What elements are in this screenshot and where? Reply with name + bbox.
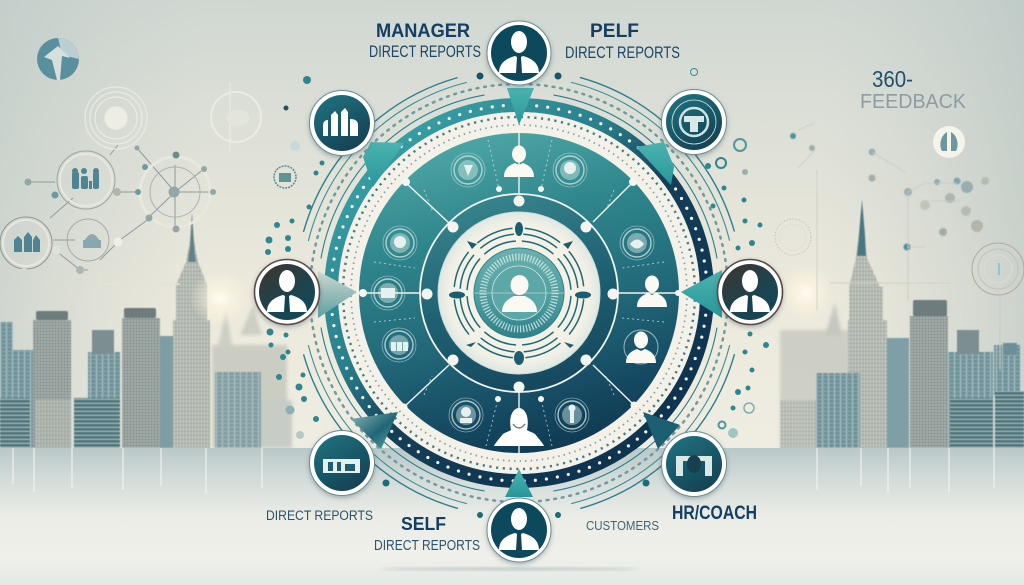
- icon: building in network circle: [83, 234, 101, 248]
- inner dark ring: [420, 194, 618, 392]
- node: manager top: [487, 21, 551, 85]
- icon: bottom woman: [494, 408, 544, 446]
- scattered dots right of wheel: [690, 68, 769, 438]
- pointer: lower left: [351, 412, 398, 449]
- icon: group in network circle: [72, 168, 99, 189]
- faint ring icons: [85, 82, 261, 152]
- label: manager direct reports: DIRECT REPORTS: [369, 43, 481, 61]
- node: upper left: [310, 90, 374, 156]
- label: pelf: PELF: [590, 20, 639, 42]
- pointer: upper right: [636, 142, 674, 185]
- disk small emblem icons: [371, 153, 654, 432]
- node: lower right: [662, 432, 726, 496]
- label: customers: CUSTOMERS: [586, 518, 659, 533]
- ring nodes: [359, 178, 681, 410]
- node: upper right: [662, 90, 726, 154]
- centre emblem: [438, 212, 600, 374]
- right skyline: [780, 200, 1024, 448]
- node: self bottom: [487, 498, 551, 562]
- label: lower left direct reports: DIRECT REPORTS: [266, 508, 373, 523]
- left skyline: [0, 213, 292, 448]
- outer dark band with dots: [331, 105, 707, 481]
- label: feedback: FEEDBACK: [860, 91, 967, 113]
- node: lower left: [310, 430, 374, 496]
- label: hr coach: HR/COACH: [672, 503, 757, 524]
- centre person icon: [502, 275, 537, 312]
- icon: right person: [637, 276, 667, 307]
- pointer: right: [681, 270, 722, 318]
- pointer: top: [507, 88, 534, 125]
- label: 360: 360-: [872, 66, 913, 92]
- main wheel disk: [359, 133, 679, 453]
- logo icon top left: [37, 38, 79, 80]
- ring icon faint: [775, 219, 811, 255]
- label: self: SELF: [401, 514, 446, 534]
- pointer: left: [318, 271, 357, 318]
- node: left: [254, 260, 320, 324]
- label: self direct reports: DIRECT REPORTS: [374, 538, 480, 554]
- sun glow left: [190, 270, 250, 326]
- pointer: lower right: [643, 412, 680, 449]
- white dashed band: [343, 117, 695, 469]
- icon: top person: [504, 146, 534, 177]
- outer arc lines: [295, 69, 743, 518]
- small ring icon left: [274, 166, 296, 188]
- sun glow right: [778, 265, 834, 321]
- reflective floor: [0, 448, 1024, 585]
- label: pelf direct reports: DIRECT REPORTS: [565, 44, 680, 62]
- disk person icons: [494, 146, 667, 446]
- ring icon right: [817, 170, 1024, 370]
- spokes: [362, 125, 678, 462]
- right side scattered icons: [775, 123, 1024, 370]
- node: right: [718, 260, 782, 324]
- scattered dots left of wheel: [265, 76, 324, 439]
- icon: white circle with lungs shape: [933, 126, 965, 158]
- icon: group in lower network circle: [14, 232, 40, 252]
- pointer: upper left: [363, 142, 404, 187]
- icon: lower right person circle: [624, 330, 658, 364]
- network diagram left: [0, 82, 261, 284]
- pointer: bottom: [505, 469, 533, 497]
- label: manager: MANAGER: [376, 20, 470, 42]
